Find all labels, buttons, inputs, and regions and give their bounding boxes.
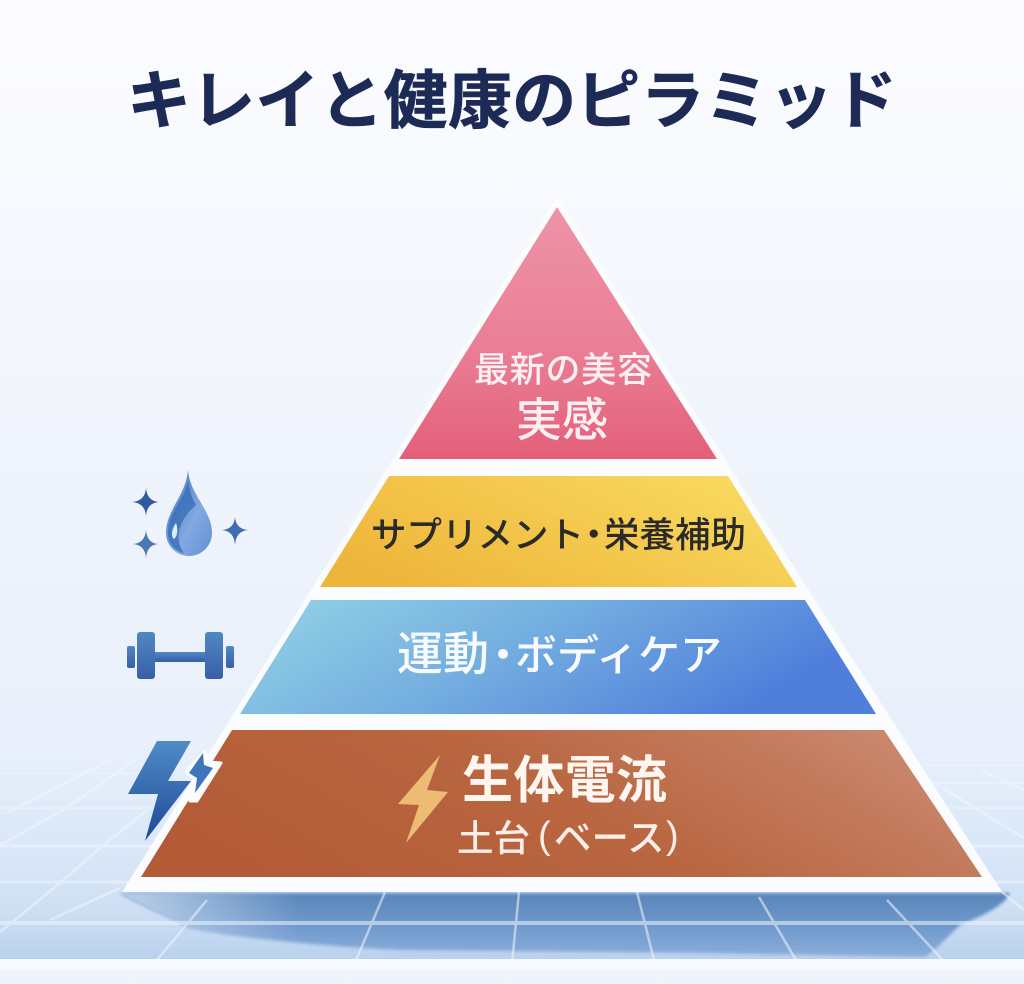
tier 3: exercise and body care: ボディケア — [515, 632, 722, 679]
tier 2: supplements and nutrition: サプリメント — [371, 515, 584, 555]
icon: dumbbell — [127, 632, 234, 679]
pyramid — [122, 197, 1002, 892]
base label — [457, 815, 679, 859]
floor grid — [0, 745, 1024, 984]
base label: ( — [538, 815, 551, 857]
tier 2: supplements and nutrition: ・ — [576, 515, 612, 555]
tier 1: latest beauty — [399, 207, 717, 459]
tier 4: bioelectric current base: 生体電流 — [462, 752, 667, 809]
tier 1: latest beauty: 最新の美容 — [474, 351, 652, 390]
tier 2: supplements and nutrition: 栄養補助 — [604, 515, 746, 555]
tier 2: supplements and nutrition — [320, 476, 797, 587]
icon: small lightning bolt — [398, 755, 448, 843]
base label: ) — [666, 815, 679, 857]
tier 3: exercise and body care: 運動 — [397, 628, 489, 680]
tier 4: bioelectric current base — [141, 730, 982, 877]
icon: water drop with sparkles — [132, 469, 248, 558]
base label: ベース — [554, 817, 665, 859]
base label: 土台 — [457, 818, 530, 859]
icon: lightning bolts — [128, 741, 221, 841]
pyramid white frame — [122, 197, 1002, 892]
title: キレイと健康のピラミッド — [127, 65, 897, 137]
tier 1: latest beauty: 実感 — [516, 394, 608, 446]
tier 3: exercise and body care: ・ — [482, 632, 524, 679]
tier 3: exercise and body care — [240, 600, 876, 714]
